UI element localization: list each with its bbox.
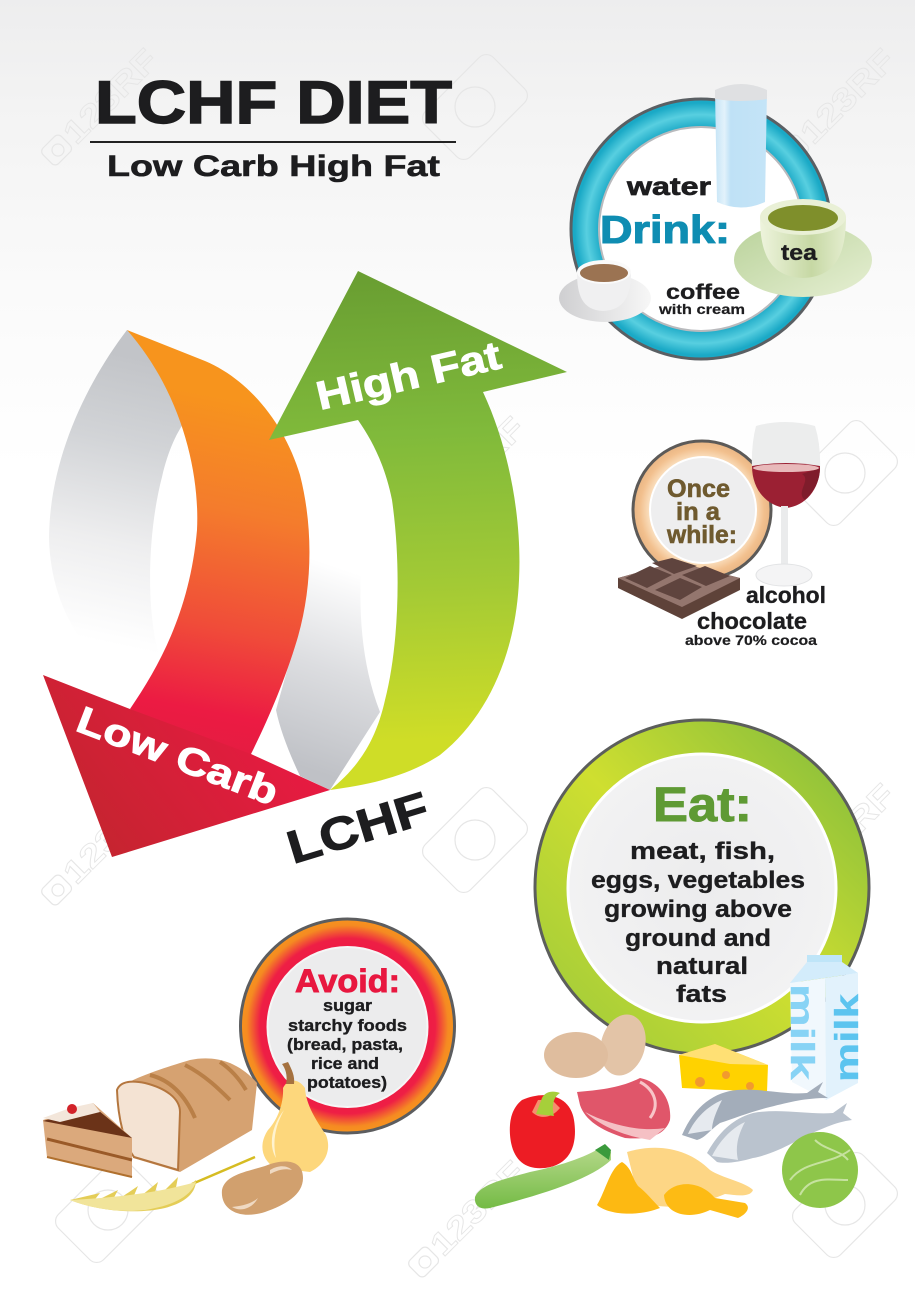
watermark pattern: 123RF (423, 410, 532, 519)
watermark pattern: 123RF (793, 777, 902, 886)
eat list: ground and (625, 925, 771, 952)
label: low carb: Low Carb (71, 699, 284, 814)
icon: wine glass (752, 422, 820, 586)
eat list: meat, fish, (630, 838, 775, 865)
arrow: low carb head (43, 675, 330, 857)
heading: once in a while: in a (676, 498, 721, 526)
icon: cake slice (43, 1103, 132, 1177)
eat list: eggs, vegetables (591, 867, 805, 894)
avoid list: sugar (323, 996, 372, 1015)
gray back band of the red arrow (49, 330, 186, 665)
label: tea: tea (781, 240, 818, 265)
icon: coffee cup (559, 260, 651, 322)
label: above 70% cocoa: above 70% cocoa (685, 633, 818, 648)
label: alcohol: alcohol (746, 582, 826, 608)
icon: red pepper (510, 1092, 575, 1168)
icon: water glass (715, 84, 767, 208)
eat list (591, 838, 805, 1008)
avoid list: potatoes) (307, 1073, 387, 1092)
heading: once in a while (666, 475, 737, 549)
avoid list: rice and (311, 1054, 379, 1073)
title: LCHF DIET (95, 69, 452, 136)
eat ring (535, 720, 869, 1054)
icon: zucchini (475, 1144, 611, 1209)
drink ring (571, 99, 831, 359)
label: with cream: with cream (658, 301, 745, 317)
icon: eggs (544, 1009, 652, 1081)
avoid ring (240, 919, 454, 1133)
arrow: high fat (269, 271, 567, 790)
icon: pear (262, 1062, 328, 1172)
heading: drink: Drink: (600, 209, 730, 252)
heading: eat: Eat: (653, 779, 752, 832)
once inner disc (650, 457, 756, 563)
panel: once in a while (618, 422, 826, 648)
LCHF twin arrows diagram (43, 271, 567, 874)
icon: bread loaf (117, 1058, 257, 1172)
title block (90, 69, 456, 183)
icon: fish pair (682, 1082, 852, 1163)
icon: chocolate bar (618, 558, 740, 619)
arrow: low carb shaft (127, 330, 309, 790)
watermark pattern: 123RF (56, 782, 165, 891)
icon: milk carton: milk (828, 993, 865, 1082)
subtitle: Low Carb High Fat (107, 150, 440, 183)
icon: potato (222, 1162, 303, 1215)
eat inner disc (568, 754, 836, 1022)
eat list: natural (656, 953, 748, 980)
panel: avoid (43, 919, 454, 1215)
label: coffee: coffee (666, 281, 740, 304)
label: chocolate: chocolate (697, 608, 807, 634)
heading: once in a while: while: (666, 521, 737, 549)
avoid inner disc (268, 947, 428, 1107)
heading: avoid: Avoid: (295, 963, 400, 999)
gray back band of the green arrow (276, 500, 380, 790)
avoid list (287, 996, 407, 1092)
heading: once in a while: Once (667, 475, 730, 503)
watermark pattern: 123RF (56, 42, 165, 151)
once ring (633, 441, 771, 579)
avoid list: (bread, pasta, (287, 1035, 403, 1054)
eat list: growing above (604, 896, 792, 923)
avoid list: starchy foods (288, 1016, 407, 1035)
label: high fat: High Fat (312, 334, 505, 419)
watermark pattern: 123RF (423, 1154, 532, 1263)
label: LCHF: LCHF (281, 781, 435, 874)
label: water: water (626, 173, 711, 201)
icon: cheese (679, 1044, 768, 1092)
icon: wheat ear (70, 1157, 255, 1211)
eat list: fats (676, 981, 727, 1008)
icon: chicken (597, 1148, 753, 1218)
icon: tea cup (734, 199, 872, 297)
icon: cabbage (782, 1132, 858, 1208)
icon: meat (577, 1078, 670, 1140)
icon: milk carton (784, 955, 865, 1100)
drink inner disc (599, 127, 803, 331)
panel: drink (559, 84, 872, 359)
icon: milk carton: milk (784, 984, 821, 1081)
watermark pattern: 123RF (793, 42, 902, 151)
panel: eat (475, 720, 869, 1218)
